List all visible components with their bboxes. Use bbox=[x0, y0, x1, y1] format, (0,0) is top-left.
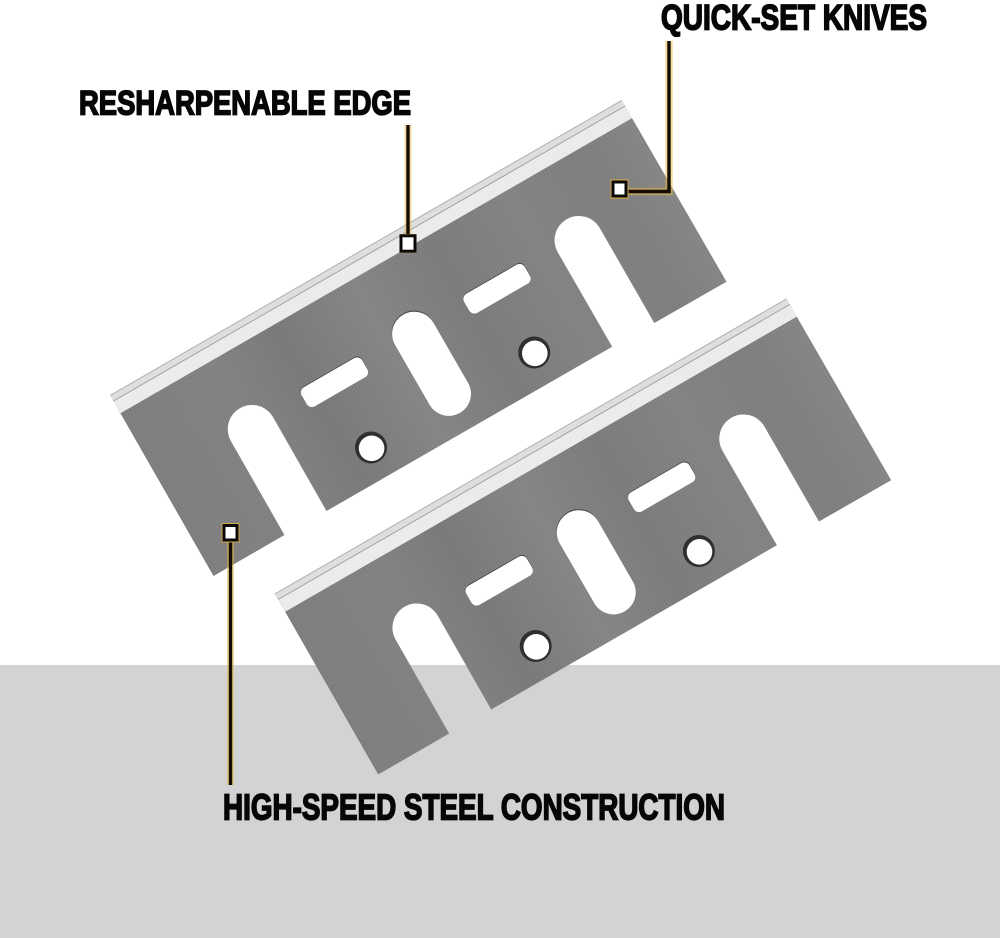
mounting slot right bbox=[626, 459, 698, 514]
knife: upper blade bbox=[110, 100, 726, 576]
sharpened bevel edge bbox=[275, 298, 797, 612]
callout line: resharpenable edge bbox=[400, 125, 416, 253]
locating hole right bbox=[683, 535, 715, 567]
centre oval slot bbox=[414, 333, 449, 394]
locating hole right bbox=[518, 336, 550, 368]
centre oval slot bbox=[579, 531, 614, 592]
mounting slot left bbox=[299, 354, 370, 409]
locating hole left bbox=[355, 432, 387, 464]
mounting slot left bbox=[463, 553, 535, 608]
grey floor band bbox=[0, 665, 1000, 938]
sharpened bevel edge bbox=[110, 100, 632, 413]
knife: lower blade bbox=[275, 298, 891, 774]
callout line: high-speed steel construction bbox=[222, 523, 240, 785]
mounting slot right bbox=[461, 261, 533, 316]
locating hole left bbox=[520, 630, 552, 662]
callout line: quick-set knives bbox=[610, 41, 669, 199]
heading: resharpenable edge: RESHARPENABLE EDGE bbox=[79, 84, 411, 122]
heading: high-speed steel construction: HIGH-SPEED STEEL CONSTRUCTION bbox=[223, 786, 725, 828]
